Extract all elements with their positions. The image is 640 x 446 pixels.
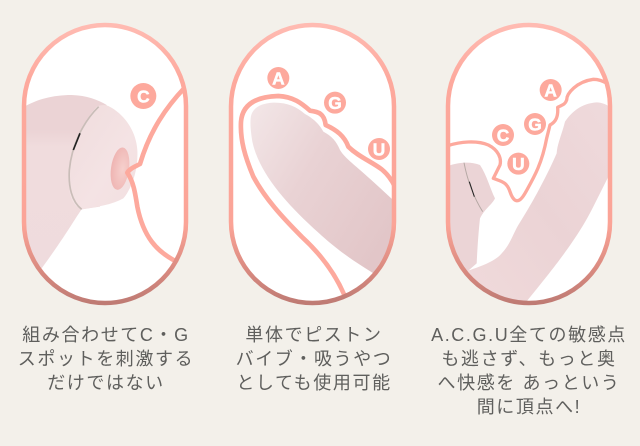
capsule border bbox=[448, 25, 610, 303]
caption: panel 2 bbox=[236, 325, 392, 393]
labels A G C U: A bbox=[544, 80, 557, 100]
labels A G C U: C bbox=[497, 125, 510, 145]
body outline bbox=[447, 79, 608, 201]
caption: panel 2: バイブ・吸うやつ bbox=[236, 348, 392, 369]
caption: panel 2: としても使用可能 bbox=[236, 373, 392, 393]
capsule fill bbox=[231, 25, 394, 303]
product: full device bbox=[443, 79, 613, 303]
labels A G U: G bbox=[328, 93, 342, 113]
body outline bbox=[241, 96, 395, 295]
labels A G C U: G bbox=[528, 114, 542, 134]
caption: panel 1: 組み合わせてC・G bbox=[22, 325, 190, 345]
capsule fill bbox=[448, 25, 610, 303]
panel: clitoral stimulation bbox=[20, 25, 186, 303]
capsule border bbox=[231, 25, 394, 303]
caption: panel 1 bbox=[18, 325, 194, 393]
caption: panel 3: A.C.G.U全ての敏感点 bbox=[431, 325, 627, 345]
caption: panel 3: も逃さず、もっと奥 bbox=[441, 349, 617, 369]
labels A G C U: U bbox=[512, 154, 525, 174]
capsule fill bbox=[24, 25, 186, 303]
panel: combined stimulation bbox=[443, 25, 613, 303]
label C: C bbox=[137, 86, 150, 106]
body outline bbox=[127, 87, 185, 262]
product: insert shaft bbox=[241, 96, 397, 295]
product: suction head bbox=[20, 87, 185, 268]
caption: panel 3: へ快感を あっという bbox=[438, 373, 620, 393]
capsule border bbox=[24, 25, 186, 303]
caption: panel 3: 間に頂点へ! bbox=[477, 397, 581, 417]
labels A G U: U bbox=[373, 139, 385, 159]
labels A G U: A bbox=[272, 68, 285, 88]
caption: panel 2: 単体でピストン bbox=[245, 325, 383, 345]
labels A G U bbox=[267, 67, 390, 160]
panel: internal stimulation bbox=[231, 25, 397, 303]
caption: panel 1: だけではない bbox=[47, 373, 165, 393]
label C bbox=[130, 83, 156, 109]
caption: panel 1: スポットを刺激する bbox=[18, 349, 194, 369]
labels A G C U bbox=[492, 79, 562, 175]
caption: panel 3 bbox=[431, 325, 627, 417]
